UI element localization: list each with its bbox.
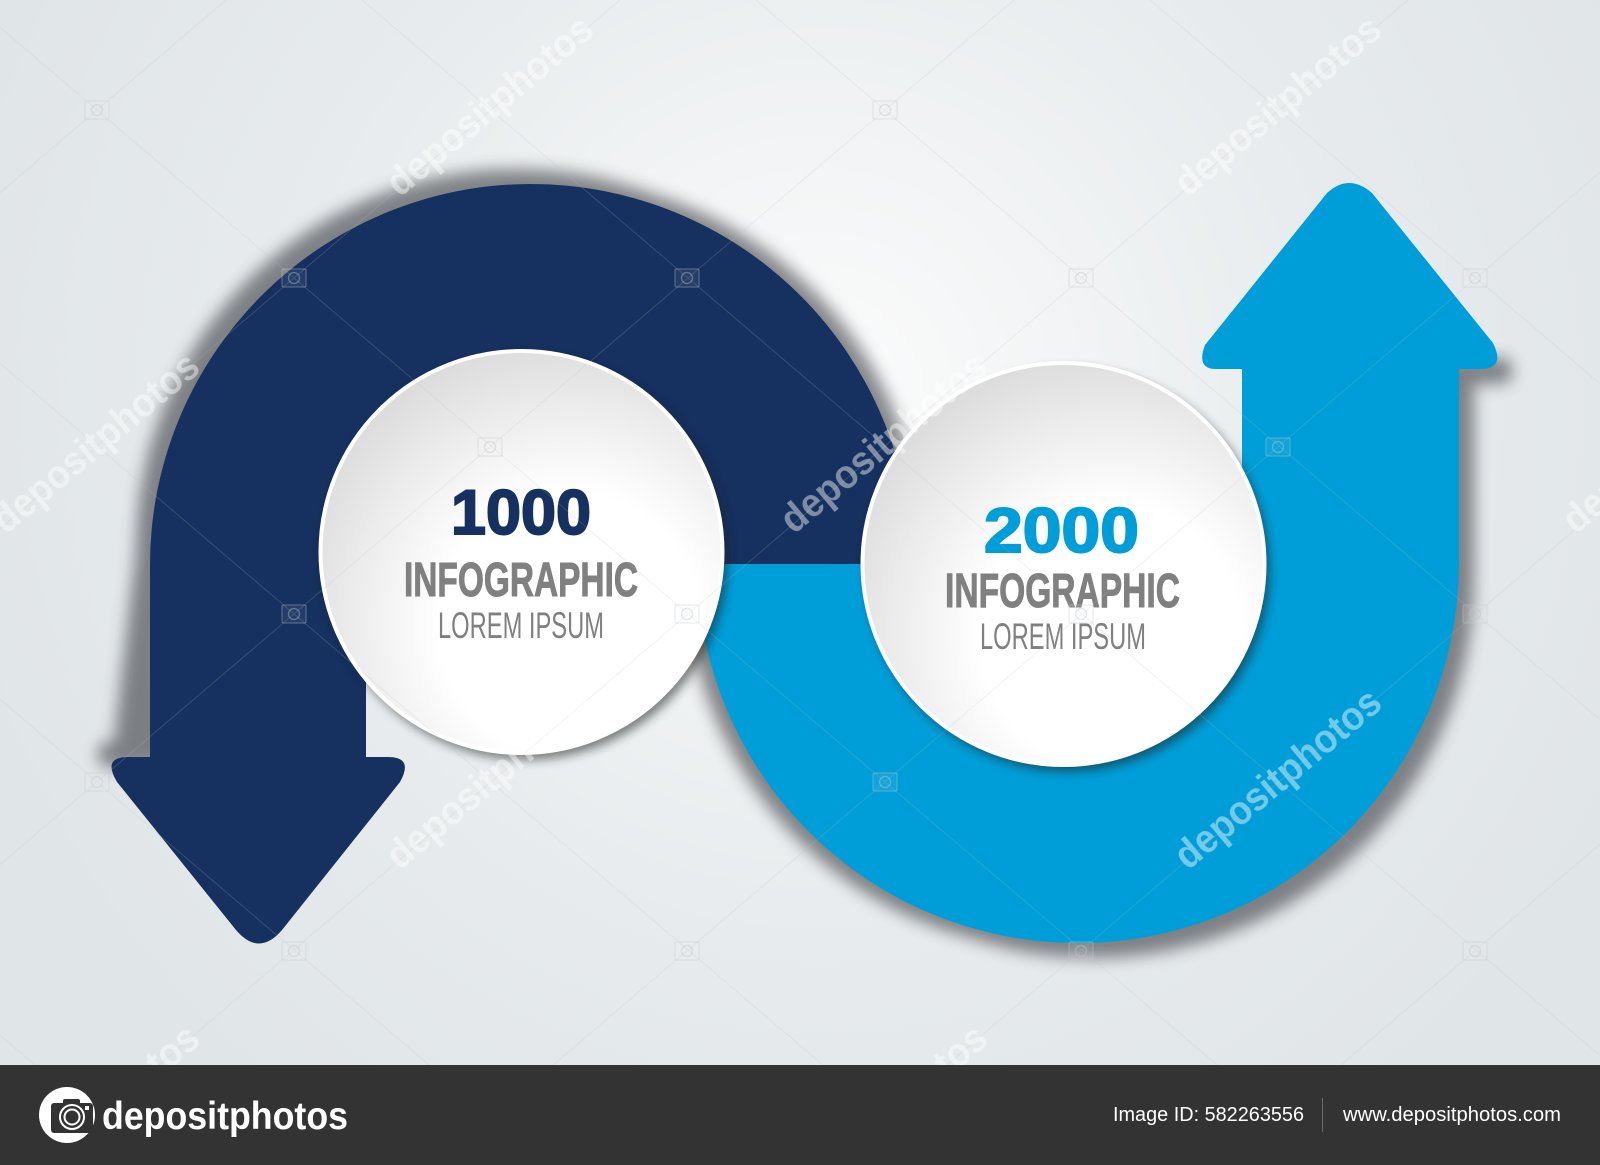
website url: www.depositphotos.com [1342,1104,1561,1126]
subtitle: lorem ipsum right: LOREM IPSUM [980,616,1146,657]
watermark text: depositphotos [378,680,602,878]
circle panel: 2000 [862,363,1270,772]
watermark text: depositphotos [1166,680,1390,878]
icon: camera logo [39,1087,95,1143]
shadow: blue arrow [685,358,1512,958]
shadow: navy arrow [98,169,924,767]
watermark text: depositphotos [378,7,602,205]
image id: Image ID: 582263556 [1113,1104,1304,1126]
footer bar [0,1065,1600,1165]
watermark text: depositphotos [772,344,996,542]
number: 1000: 1000 [451,478,591,548]
heading: infographic: INFOGRAPHIC [404,554,638,607]
watermark camera icons [85,101,1487,960]
circle panel: 1000 [320,351,728,760]
navy curved arrow [112,184,912,944]
number: 2000: 2000 [984,496,1139,566]
blue curved arrow [697,183,1497,943]
heading: infographic right: INFOGRAPHIC [945,565,1180,618]
watermark text: depositphotos [1166,7,1390,205]
logo wordmark: depositphotos [102,1095,348,1138]
subtitle: lorem ipsum: LOREM IPSUM [438,605,604,646]
